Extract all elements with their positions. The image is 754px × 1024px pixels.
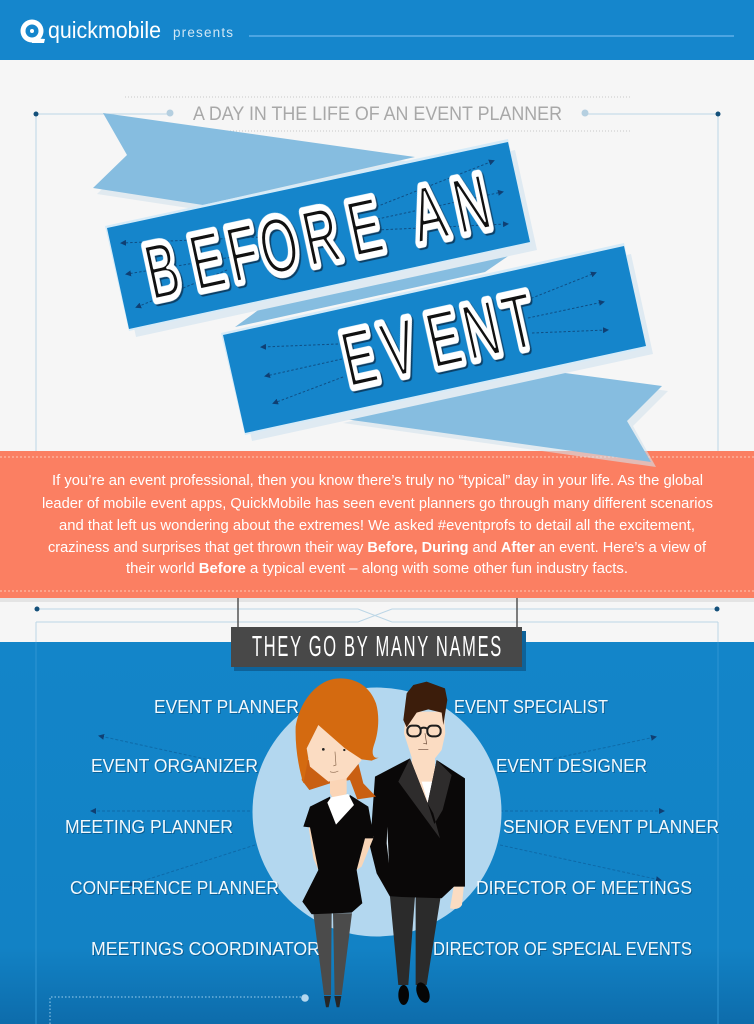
name labels: EVENT ORGANIZER	[91, 756, 258, 776]
subtitle: A DAY IN THE LIFE OF AN EVENT PLANNER	[193, 104, 562, 125]
hanging sign	[231, 598, 526, 671]
intro paragraph	[42, 473, 713, 577]
intro paragraph: their world Before a typical event – along with some other fun industry facts.	[126, 561, 628, 577]
ribbon: centre fold	[235, 248, 520, 327]
name labels	[65, 697, 719, 959]
bottom dotted connector	[50, 994, 309, 1024]
banner: event	[221, 243, 653, 441]
heading: event: EVENT	[334, 276, 542, 403]
ribbon: bottom tail	[337, 371, 668, 467]
frame dots	[34, 110, 720, 116]
intro paragraph: and that left us wondering about the extremes! We asked #eventprofs to detail all the excitement,	[59, 518, 695, 534]
coral intro panel	[0, 451, 754, 602]
illustration: woman	[296, 678, 379, 1007]
name labels: CONFERENCE PLANNER	[70, 878, 279, 898]
heading: before an: BEFORE AN	[137, 157, 498, 316]
intro paragraph: craziness and surprises that get thrown their way Before, During and After an event. Here’s a view of	[48, 540, 707, 556]
frame dots lower	[34, 606, 720, 612]
presents label: presents	[173, 25, 233, 40]
intro paragraph: If you’re an event professional, then you know there’s truly no “typical” day in your life. As the global	[52, 473, 703, 489]
frame lines	[36, 97, 718, 642]
banner: before an	[105, 139, 537, 337]
dashed connector arrows	[92, 736, 663, 885]
illustration: man	[370, 682, 465, 1005]
name labels: EVENT DESIGNER	[496, 756, 647, 776]
name labels: DIRECTOR OF MEETINGS	[476, 878, 692, 898]
heading: before an: BEFORE AN	[137, 157, 498, 316]
arrows: before an	[122, 161, 507, 307]
arrows: event	[262, 273, 607, 403]
intro paragraph: leader of mobile event apps, QuickMobile has seen event planners go through many different scenarios	[42, 496, 713, 512]
name labels: MEETING PLANNER	[65, 817, 233, 837]
name labels: MEETINGS COORDINATOR	[91, 939, 320, 959]
header bar	[0, 0, 754, 60]
name labels: SENIOR EVENT PLANNER	[503, 817, 719, 837]
blue section background	[0, 642, 754, 1024]
icon: quickmobile logo	[20, 20, 45, 43]
circle behind figures	[252, 688, 502, 936]
name labels: EVENT PLANNER	[154, 697, 299, 717]
name labels: EVENT SPECIALIST	[454, 697, 608, 717]
ribbon: top tail	[93, 113, 420, 211]
heading: event: EVENT	[334, 276, 542, 403]
logo wordmark: quickmobile	[48, 17, 161, 43]
name labels: DIRECTOR OF SPECIAL EVENTS	[433, 939, 692, 959]
sign title: THEY GO BY MANY NAMES	[252, 631, 503, 663]
